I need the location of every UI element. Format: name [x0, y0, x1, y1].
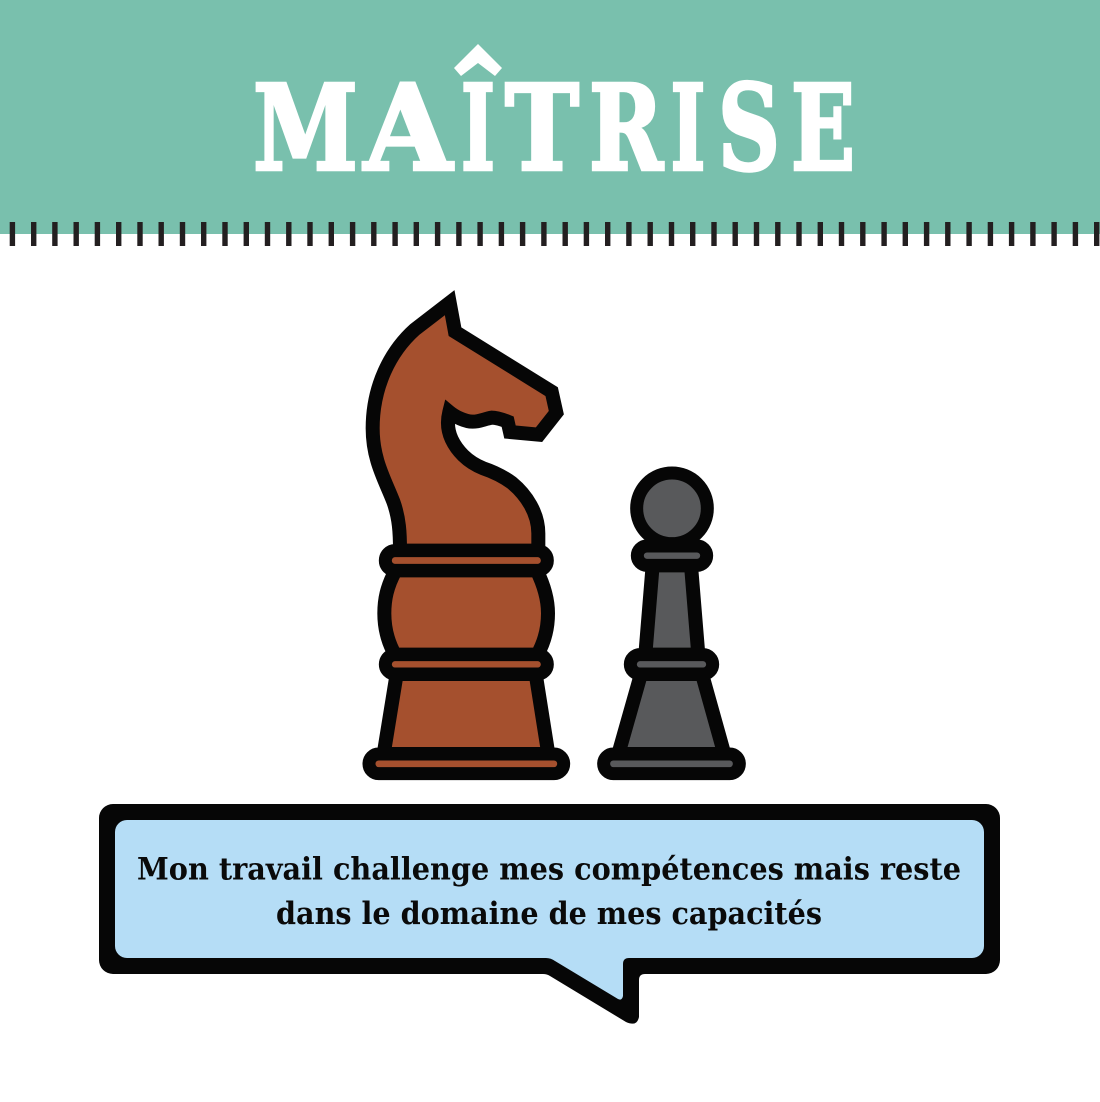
title: E — [791, 58, 855, 198]
header band — [0, 0, 1100, 234]
icon: chess knight — [369, 303, 564, 774]
title: A — [363, 58, 453, 198]
speech bubble fill — [115, 820, 984, 1000]
title: T — [505, 58, 579, 198]
icon: chess pawn — [604, 473, 739, 774]
callout text: dans le domaine de mes capacités — [276, 896, 822, 932]
speech bubble outline — [99, 804, 1000, 1024]
title accent — [454, 44, 502, 76]
callout text: Mon travail challenge mes compétences mais reste — [137, 852, 961, 888]
title: Î — [461, 58, 495, 198]
title: M — [253, 58, 358, 198]
title: S — [718, 58, 780, 198]
title: R — [589, 58, 664, 198]
perforated tick row — [10, 222, 1099, 246]
callout — [99, 804, 1000, 1024]
callout text — [137, 852, 961, 932]
title: I — [670, 58, 706, 198]
